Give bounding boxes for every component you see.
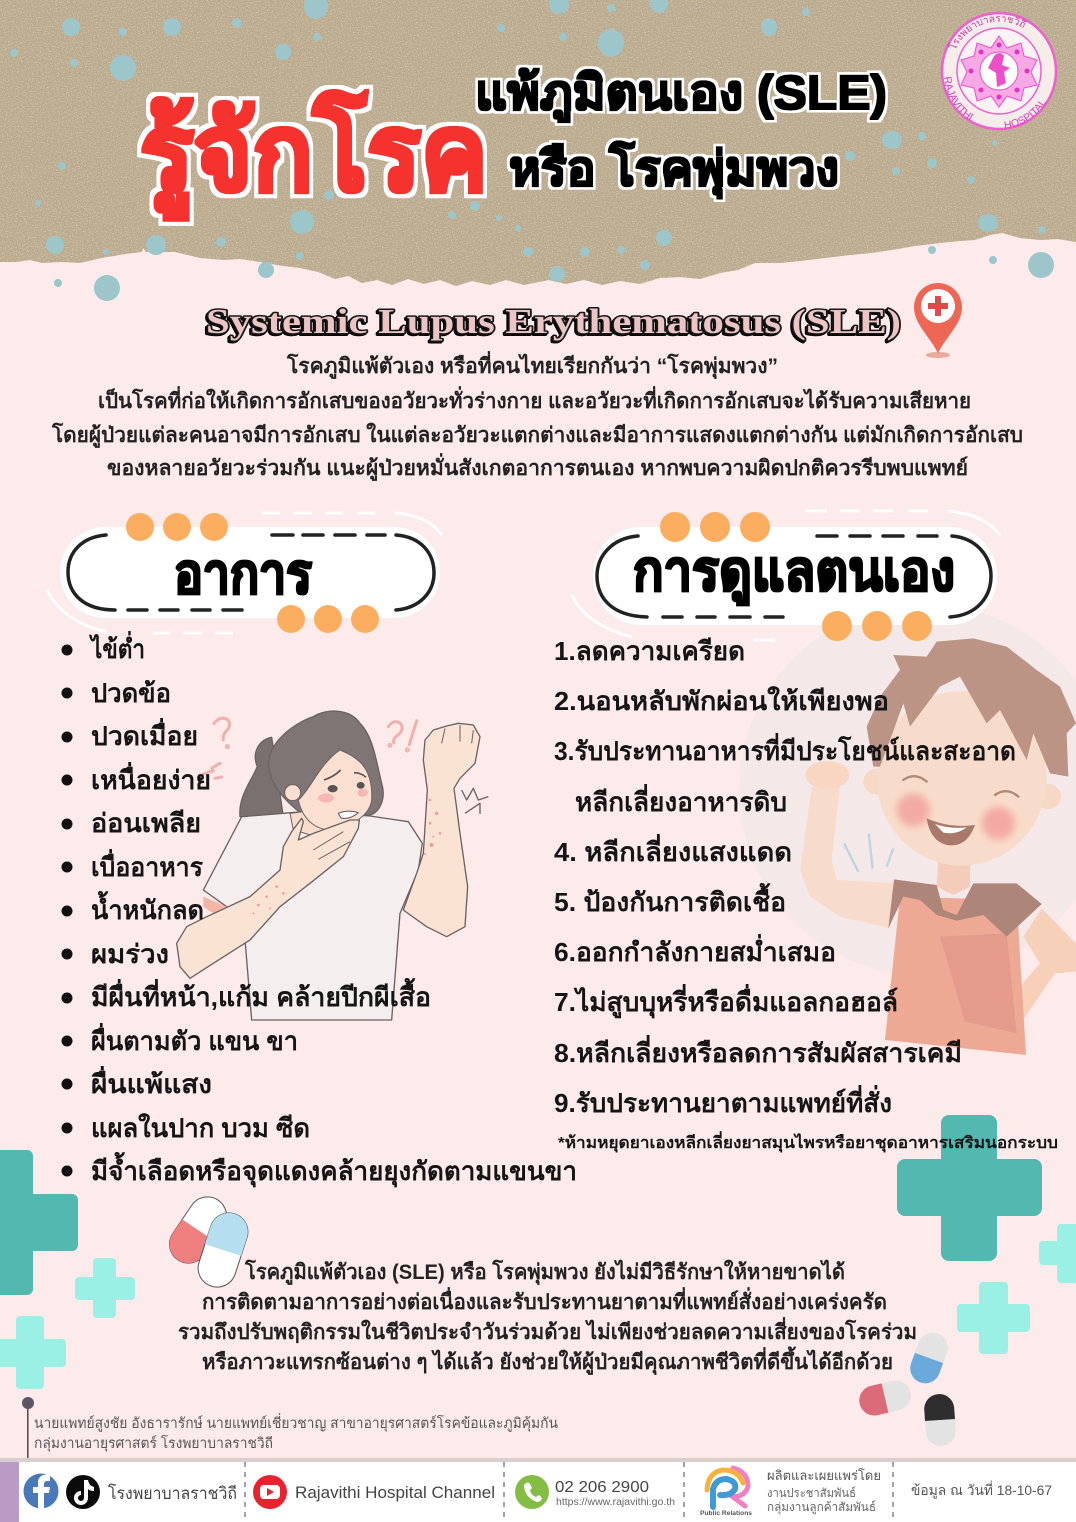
- header torn paper: [0, 0, 1076, 292]
- illustration: woman with rash: [177, 711, 488, 1020]
- icon: phone: [515, 1475, 549, 1509]
- footer bar: [0, 1458, 1076, 1522]
- self care list: หลีกเลี่ยงอาหารดิบ: [575, 783, 787, 817]
- eyes: [903, 776, 1018, 797]
- ponytail: [240, 737, 283, 817]
- shirt body: [885, 897, 1026, 1055]
- label: website: https://www.rajavithi.go.th: [556, 1497, 675, 1508]
- warning note: *ห้ามหยุดยาเองหลีกเลี่ยงยาสมุนไพรหรือยาชุดอาหารเสริมนอกระบบ: [558, 1131, 1058, 1153]
- neck: [290, 810, 330, 837]
- hair: [867, 638, 1076, 777]
- intro paragraph: [51, 350, 1023, 482]
- smile: [927, 818, 975, 845]
- symptoms list: ปวดข้อ: [91, 678, 171, 708]
- icon: pills lower right: [856, 1328, 957, 1447]
- label: pr unit: งานประชาสัมพันธ์: [767, 1486, 856, 1500]
- underarm shadow: [203, 877, 418, 920]
- heading badge: symptoms: [47, 513, 442, 633]
- flex lines: [844, 833, 893, 872]
- icon: public relations logo: [700, 1468, 752, 1517]
- hospital logo: [940, 12, 1058, 130]
- self care list: 3.รับประทานอาหารที่มีประโยชน์และสะอาด: [554, 732, 1016, 766]
- symptoms list: เหนื่อยง่าย: [91, 761, 211, 795]
- closing paragraph: หรือภาวะแทรกซ้อนต่าง ๆ ได้แล้ว ยังช่วยให้ผู้ป่วยมีคุณภาพชีวิตที่ดีขึ้นได้อีกด้วย: [202, 1346, 893, 1376]
- icon: youtube: [253, 1475, 287, 1509]
- background circle behind boy: [739, 604, 1076, 976]
- title: line 1: แพ้ภูมิตนเอง (SLE): [475, 67, 887, 123]
- intro paragraph: โรคภูมิแพ้ตัวเอง หรือที่คนไทยเรียกกันว่า “โรคพุ่มพวง”: [286, 350, 778, 380]
- left arm and hand: [177, 818, 359, 978]
- self care list: 5. ป้องกันการติดเชื้อ: [554, 882, 786, 917]
- label: channel: Rajavithi Hospital Channel: [295, 1484, 495, 1502]
- closing paragraph: โรคภูมิแพ้ตัวเอง (SLE) หรือ โรคพุ่มพวง ยังไม่มีวิธีรักษาให้หายขาดได้: [244, 1259, 845, 1286]
- self care list: [554, 636, 1016, 1118]
- face: [298, 750, 372, 830]
- label: hospital name: โรงพยาบาลราชวิถี: [108, 1483, 237, 1503]
- self care list: 9.รับประทานยาตามแพทย์ที่สั่ง: [554, 1084, 892, 1118]
- symptoms list: อ่อนเพลีย: [91, 808, 201, 838]
- hospital logo: RAJAVITHI: [944, 77, 974, 120]
- hospital logo: โรงพยาบาลราชวิถี: [948, 16, 1026, 48]
- title: line 2: หรือ โรคพุ่มพวง: [509, 140, 839, 199]
- subtitle: Systemic Lupus Erythematosus: Systemic Lupus Erythematosus (SLE): [206, 302, 901, 341]
- speckle dots: [10, 0, 1054, 301]
- closing paragraph: [178, 1259, 917, 1376]
- symptoms list: [62, 630, 577, 1188]
- rash spots: [252, 799, 441, 914]
- heading badge: symptoms: อาการ: [174, 542, 312, 605]
- icon: public relations logo: Public Relations: [700, 1510, 752, 1517]
- shirt: [203, 812, 422, 1020]
- closing paragraph: รวมถึงปรับพฤติกรรมในชีวิตประจำวันร่วมด้วย ไม่เพียงช่วยลดความเสี่ยงของโรคร่วม: [178, 1316, 917, 1344]
- icon: facebook: [24, 1474, 58, 1509]
- self care list: 7.ไม่สูบบุหรี่หรือดื่มแอลกอฮอล์: [554, 983, 898, 1019]
- author credit: กลุ่มงานอายุรศาสตร์ โรงพยาบาลราชวิถี: [34, 1434, 273, 1452]
- symptoms list: น้ำหนักลด: [91, 890, 204, 925]
- label: phone number: 02 206 2900: [555, 1479, 649, 1496]
- intro paragraph: โดยผู้ป่วยแต่ละคนอาจมีการอักเสบ ในแต่ละอวัยวะแตกต่างและมีอาการแสดงแตกต่างกัน แต่มักเกิดการอักเสบ: [51, 422, 1023, 449]
- label: customer unit: กลุ่มงานลูกค้าสัมพันธ์: [767, 1500, 876, 1515]
- symptoms list: ผื่นตามตัว แขน ขา: [91, 1022, 298, 1056]
- symptoms list: ปวดเมื่อย: [91, 717, 198, 751]
- self care list: 8.หลีกเลี่ยงหรือลดการสัมผัสสารเคมี: [554, 1034, 962, 1068]
- symptoms list: เบื่ออาหาร: [91, 848, 203, 882]
- symptoms list: ไข้ต่ำ: [88, 630, 145, 664]
- heading badge: self care: การดูแลตนเอง: [633, 539, 955, 606]
- symptoms list: ผมร่วง: [91, 939, 169, 969]
- icon: location pin with plus: [914, 283, 962, 358]
- neck: [937, 860, 970, 895]
- icon: pills upper left: [162, 1190, 253, 1292]
- head: [863, 769, 889, 794]
- bullets: [62, 644, 72, 1176]
- symptoms list: ผื่นแพ้แสง: [91, 1065, 212, 1099]
- symptoms list: มีจ้ำเลือดหรือจุดแดงคล้ายยุงกัดตามแขนขา: [91, 1151, 577, 1188]
- illustration: happy boy: [800, 638, 1076, 1055]
- icon: tiktok: [66, 1475, 100, 1509]
- author credit: [22, 1397, 558, 1463]
- cross decorations: [0, 1115, 1076, 1389]
- intro paragraph: เป็นโรคที่ก่อให้เกิดการอักเสบของอวัยวะทั่วร่างกาย และอวัยวะที่เกิดการอักเสบจะได้รับความเสียหาย: [98, 385, 971, 413]
- hospital logo: HOSPITAL: [1004, 101, 1046, 129]
- shirt sleeves: [888, 879, 1042, 937]
- author credit: นายแพทย์สูงชัย อังธารารักษ์ นายแพทย์เชี่ยวชาญ สาขาอายุรศาสตร์โรคข้อและภูมิคุ้มกัน: [34, 1413, 558, 1432]
- closing paragraph: การติดตามอาการอย่างต่อเนื่องและรับประทานยาตามที่แพทย์สั่งอย่างเคร่งครัด: [202, 1286, 887, 1314]
- hair: [269, 711, 383, 815]
- question marks: [203, 718, 417, 778]
- symptoms list: แผลในปาก บวม ซีด: [91, 1113, 310, 1143]
- self care list: 6.ออกกำลังกายสม่ำเสมอ: [554, 933, 836, 967]
- self care list: 4. หลีกเลี่ยงแสงแดด: [554, 833, 792, 867]
- label: produced by: ผลิตและเผยแพร่โดย: [767, 1468, 881, 1483]
- title: [140, 67, 887, 220]
- title: red main word: รู้จักโรค: [140, 90, 488, 220]
- heading badge: self care: [572, 511, 1000, 641]
- raised arm: [800, 787, 900, 928]
- label: data date: ข้อมูล ณ วันที่ 18-10-67: [911, 1481, 1052, 1499]
- symptoms list: มีผื่นที่หน้า,แก้ม คล้ายปีกผีเสื้อ: [91, 977, 431, 1012]
- pain mark: [462, 788, 488, 814]
- self care list: 2.นอนหลับพักผ่อนให้เพียงพอ: [554, 686, 889, 716]
- self care list: 1.ลดความเครียด: [554, 636, 745, 666]
- far arm: [1008, 908, 1076, 1027]
- right arm: [403, 723, 480, 937]
- intro paragraph: ของหลายอวัยวะร่วมกัน แนะผู้ป่วยหมั่นสังเกตอาการตนเอง หากพบความผิดปกติควรรีบพบแพทย์: [107, 452, 968, 482]
